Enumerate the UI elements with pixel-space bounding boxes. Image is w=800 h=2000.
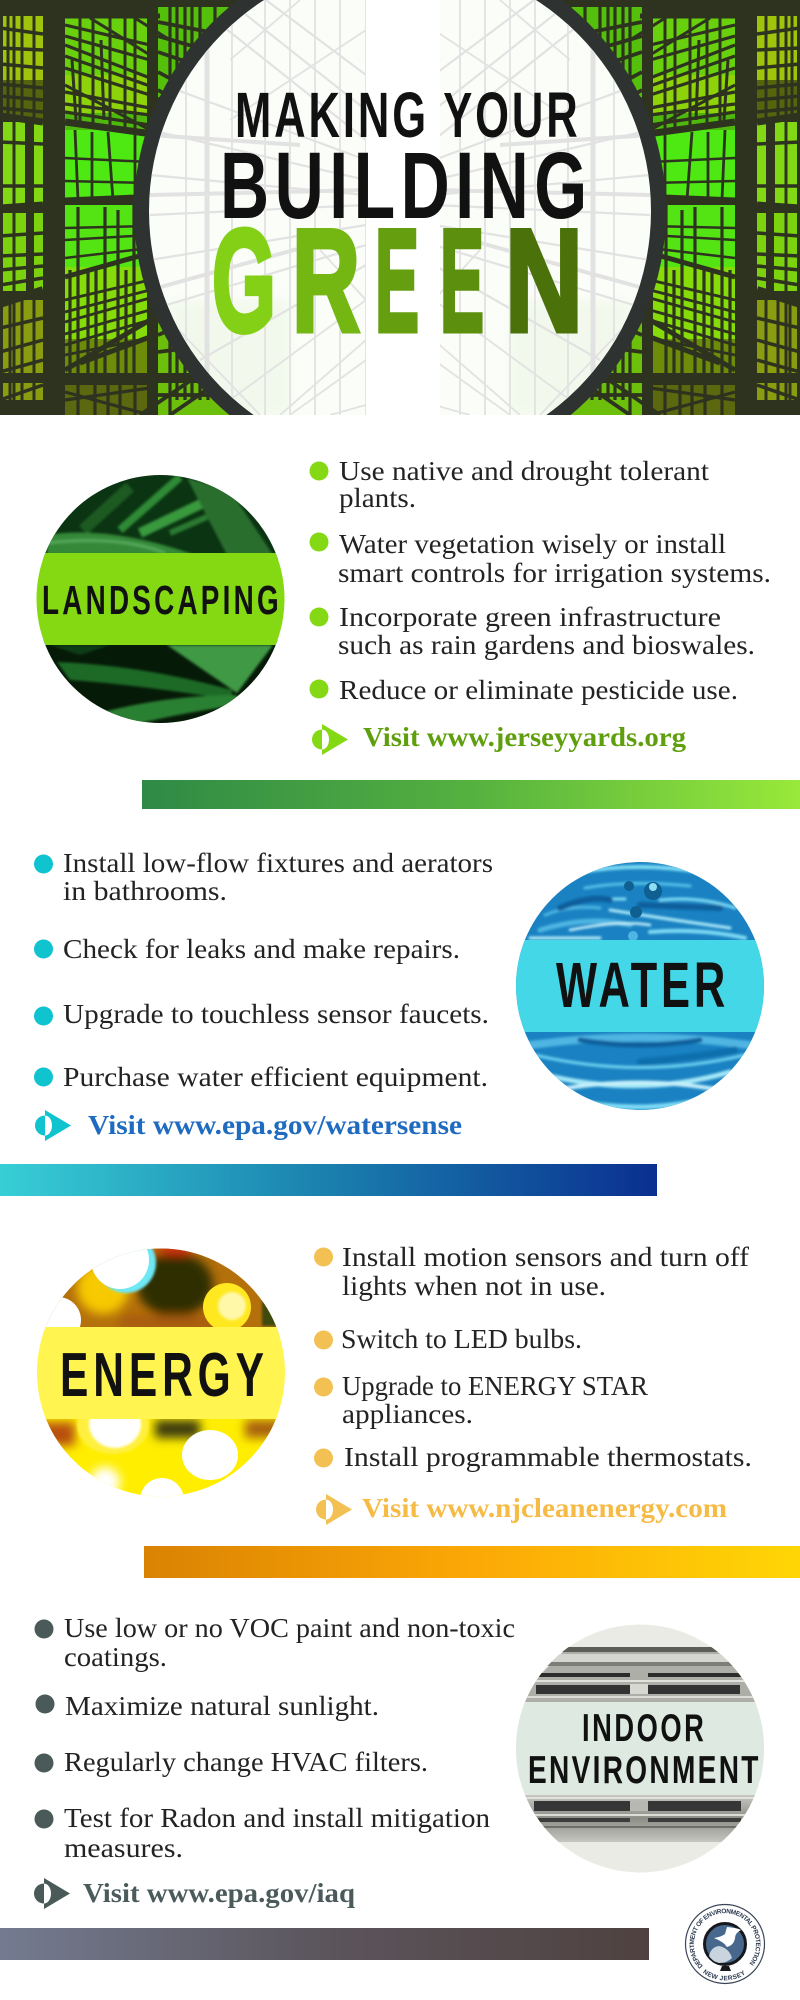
panel: water — [0, 847, 770, 1196]
indoor tip 1: Use low or no VOC paint and non-toxic — [64, 1612, 515, 1643]
energy link: Visit www.njcleanenergy.com — [362, 1492, 727, 1523]
indoor link: Visit www.epa.gov/iaq — [83, 1877, 356, 1908]
landscaping tip 3: such as rain gardens and bioswales. — [338, 629, 755, 660]
title line: green: E — [375, 199, 419, 362]
title — [214, 92, 583, 335]
title line: green: N — [505, 199, 583, 362]
title line: green: G — [212, 199, 276, 362]
indoor tip 4: measures. — [64, 1832, 183, 1863]
water label: WATER — [556, 949, 725, 1021]
icon: department seal logo — [684, 1904, 766, 1984]
indoor label: ENVIRONMENT — [528, 1749, 759, 1792]
water tip 1: Install low-flow fixtures and aerators — [63, 847, 493, 878]
icon: department seal logo: DEPARTMENT OF ENVIRONMENTAL PROTECTION — [689, 1908, 760, 1969]
water label band — [510, 940, 770, 1032]
indoor label band — [510, 1702, 770, 1795]
energy tip 2: Switch to LED bulbs. — [341, 1323, 582, 1354]
icon: arrow — [34, 1878, 70, 1909]
indoor tip 4 — [34, 1802, 490, 1863]
indoor tip 1 — [34, 1612, 515, 1672]
landscaping tip 3: Incorporate green infrastructure — [339, 601, 721, 632]
water tip 4: Purchase water efficient equipment. — [63, 1061, 488, 1092]
water tip 2: Check for leaks and make repairs. — [63, 933, 460, 964]
title line: green: R — [292, 199, 360, 362]
indoor label: INDOOR — [582, 1707, 704, 1750]
water photo circle — [510, 855, 770, 1117]
indoor gradient bar — [0, 1928, 649, 1960]
indoor tip 4: Test for Radon and install mitigation — [64, 1802, 490, 1833]
icon: arrow — [35, 1110, 71, 1141]
landscaping label: LANDSCAPING — [42, 578, 279, 623]
water link: Visit www.epa.gov/watersense — [88, 1109, 462, 1140]
landscaping photo circle — [30, 470, 290, 730]
title line: making your: MAKING YOUR — [235, 79, 578, 151]
energy tip 4: Install programmable thermostats. — [344, 1441, 752, 1472]
icon: department seal logo: NEW JERSEY — [703, 1969, 744, 1980]
indoor tip 3: Regularly change HVAC filters. — [64, 1746, 428, 1777]
indoor label — [528, 1707, 759, 1792]
title line: green: E — [440, 199, 484, 362]
water tip 3: Upgrade to touchless sensor faucets. — [63, 998, 489, 1029]
landscaping tip 2: Water vegetation wisely or install — [339, 528, 726, 559]
water tip 1: in bathrooms. — [63, 875, 227, 906]
hero photo: green building scaffold — [0, 0, 800, 415]
landscaping tip 1: plants. — [339, 482, 416, 513]
icon: arrow — [312, 724, 348, 755]
landscaping gradient bar — [142, 780, 800, 809]
energy label: ENERGY — [60, 1341, 264, 1410]
panel: indoor environment — [0, 1612, 766, 1984]
energy photo circle — [37, 1248, 285, 1496]
landscaping label band — [30, 553, 290, 645]
landscaping tip 3 — [310, 601, 755, 660]
hero banner — [0, 0, 800, 415]
landscaping tip 1 — [310, 455, 709, 513]
water gradient bar — [0, 1164, 657, 1196]
energy label band — [30, 1327, 292, 1419]
landscaping tip 2 — [310, 528, 771, 588]
indoor tip 1: coatings. — [64, 1641, 167, 1672]
panel: landscaping — [30, 455, 800, 809]
energy tip 1 — [314, 1241, 750, 1301]
panel: energy — [30, 1231, 800, 1578]
indoor photo circle — [510, 1620, 770, 1880]
landscaping tip 2: smart controls for irrigation systems. — [338, 557, 771, 588]
energy gradient bar — [144, 1546, 800, 1578]
icon: arrow — [316, 1494, 352, 1525]
energy tip 3: Upgrade to ENERGY STAR — [342, 1370, 649, 1401]
title line: building: BUILDING — [220, 133, 587, 239]
landscaping tip 4: Reduce or eliminate pesticide use. — [339, 674, 738, 705]
dark ring around title circle — [134, 0, 666, 415]
indoor tip 2: Maximize natural sunlight. — [65, 1690, 379, 1721]
energy tip 1: Install motion sensors and turn off — [342, 1241, 750, 1272]
energy tip 3 — [314, 1370, 649, 1429]
energy tip 1: lights when not in use. — [342, 1270, 606, 1301]
landscaping tip 1: Use native and drought tolerant — [339, 455, 709, 486]
white title circle — [149, 0, 651, 415]
water tip 1 — [34, 847, 493, 906]
landscaping link: Visit www.jerseyyards.org — [363, 721, 686, 752]
energy tip 3: appliances. — [342, 1398, 473, 1429]
